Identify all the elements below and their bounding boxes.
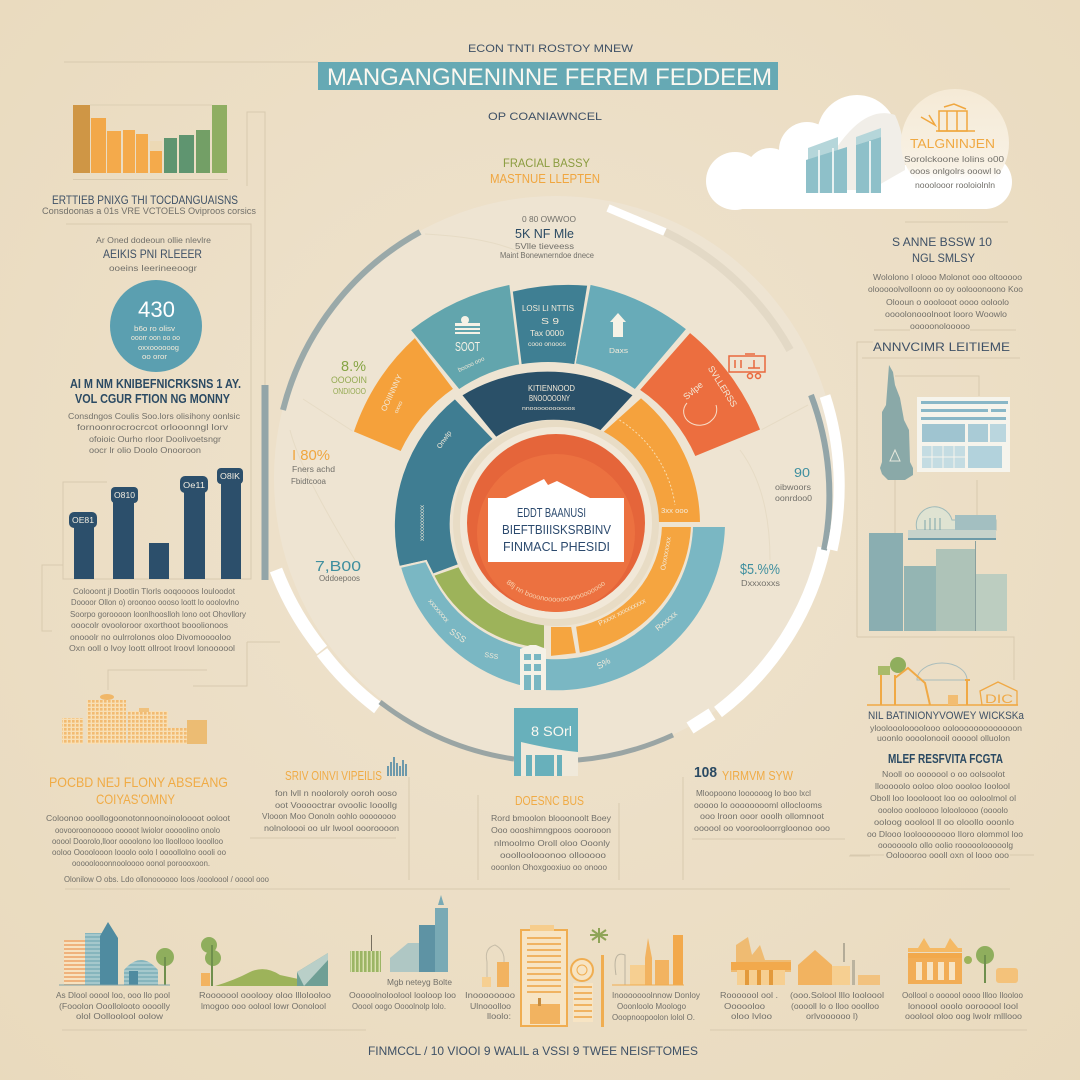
central hub: EDDT BAANUSI [517,505,586,520]
right lower text block: Nooll oo ooooool o oo oolsoolot [882,770,1006,779]
segment: light teal bottom [400,526,726,691]
right lower text block: oooloo oooloooo lolooloooo (oooolo [878,806,1009,815]
stat circle 430 [110,280,202,372]
wedge labels: Rxxxxx [654,609,679,633]
bottom text 7: orlvoooooo l) [806,1012,858,1021]
segment: navy top [461,371,634,438]
wedge labels: Onwlp [436,430,453,450]
outer ring arcs [265,208,839,760]
bottom text 7 [790,991,884,1021]
wedge labels: OOIINNNY [379,373,404,413]
central disc [265,196,839,760]
bottom text 5: Ooopnoopoolon lolol O. [612,1013,695,1022]
right lower text block: ooloog ooolool ll oo oloollo ooonlo [874,818,1015,827]
bottom text 1: olol Oolloolool oolow [76,1012,163,1021]
bar chart caption: Consdoonas a 01s VRE VCTOELS Oviproos corsics [42,206,256,216]
stat label: Ar Oned dodeoun ollie nlevlre [96,236,212,245]
wedge labels: xxxxxxxxxxxx [420,505,426,541]
bottom text 3: Ooool oogo Oooolnolp lolo. [352,1002,446,1011]
wedge labels: 3xx ooo [661,508,688,515]
central hub: BIEFTBIIISKSRBINV [502,522,611,537]
bottom text 6 [720,991,778,1021]
bottom text 2: Rooooool ooolooy oloo lllolooloo [199,991,332,1000]
left text block: fornoonrocrocrcot orlooonngl lorv [77,423,228,432]
wedge labels: S 9 [541,317,560,326]
bottom text 7: (ooo.Solool lllo looloool [790,991,884,1000]
bottom illustration 4: central tower [482,925,608,1027]
callout: 90: oibwoors [775,483,811,492]
subtitle: OP COANIAWNCEL [488,111,602,123]
orange heading block: oovooroonooooo ooooot lwiolor ooooolino onolo [55,826,221,835]
left text block: AI M NM KNIBEFNICRKSNS 1 AY. [70,376,241,391]
text block: left column: oot Vooooctrar ovoolic Iooollg [275,801,397,810]
stat label: ooeins Ieerineeoogr [109,264,197,273]
bottom illustration 2: landscape [201,937,328,986]
icon: orange city block [62,694,207,744]
right lower text block [867,710,1025,860]
callout: 8%: OOOOIN [331,375,367,385]
navy column chart: OE81 [72,516,95,525]
cloud panel: Sorolckoone lolins o00 [904,155,1005,164]
bottom text 8: ooolool oloo oog lwolr mlllooo [905,1012,1023,1021]
right text block: Wololono l olooo Molonot ooo oltooooo [873,273,1023,282]
bottom text 8 [902,991,1024,1021]
footer: FINMCCL / 10 VIOOI 9 WALIL a VSSI 9 TWEE NEISFTOMES [368,1044,698,1058]
right lower text block: MLEF RESFVITA FCGTA [888,751,1003,766]
wedge labels: Svlpe [681,380,705,402]
text block: right column: oooool oo voorooloorrgloonoo ooo [694,824,831,833]
segment: orange band [575,526,692,654]
block skyline chart [869,533,1007,631]
bottom text 1: (Fooolon Ooollolooto oooolly [59,1002,170,1011]
bar chart: top left [73,105,228,180]
stat circle 430: 430 [138,297,175,322]
column chart text: ooocolr ovooloroor oxorthoot booolionoos [71,621,228,630]
bottom text 4: lloolo: [487,1012,511,1021]
bar chart caption: ERTTIEB PNIXG THI TOCDANGUAISNS [52,193,238,207]
central hub [453,420,659,626]
house label [488,479,624,562]
stat circle 430: b6o ro olisv [134,326,176,333]
callout: top disc [500,215,595,260]
dotted arc on orange [616,418,675,505]
bottom text 8: Oollool o oooool oooo llloo Ilooloo [902,991,1024,1000]
right lower text block: Oboll loo looolooot loo oo ooloolmol ol [870,794,1016,803]
bottom text 2 [199,991,332,1011]
orange heading block [46,774,270,884]
bottom text 3: Mgb neteyg Bolte [387,978,453,987]
callout: 8%: 8.% [341,358,366,375]
callout: 7,800: 7,B00 [315,558,361,575]
wedge labels [379,304,739,671]
text block: centre column: ooolloolooonoo ollooooo [500,851,607,860]
bar chart caption [42,193,256,216]
left text block [68,376,241,455]
callout: top disc: 5Vlle tieveess [515,242,574,251]
column chart text: Oxn ooll o lvoy loott ollroot lroovl lonoooool [69,644,235,653]
right text block: Olooun o ooolooot oooo ooloolo [886,298,1010,307]
wedge labels: Tax 0000 [530,329,565,338]
outer ring wedges [353,284,761,457]
right text block: oooolonooolnoot looro Woowlo [885,310,1008,319]
orange heading block: Olonilow O obs. Ldo ollonoooooo Ioos /oooloool / ooool ooo [64,875,270,884]
callout: 180%: Fbidtcooa [291,477,327,486]
wedge labels: nnooooooooooos [522,406,575,412]
left text block: VOL CGUR FTION NG MONNY [75,391,230,406]
right lower text block: llooooolo ooloo oloo oooloo Ioolool [875,782,1010,791]
wedge: red [639,332,761,457]
wedge labels: BNOOOOONY [529,394,571,403]
navy column chart [69,468,243,579]
right text block [868,235,1024,331]
stat circle 430: oo oror [142,354,168,361]
peach circle [901,89,1009,197]
cloud panel: TALGNINJEN [910,136,995,151]
bottom text 3 [349,978,457,1011]
segment: green [433,566,545,649]
header kicker: ECON TNTI ROSTOY MNEW [468,43,634,55]
wedge labels: boooo ooo [457,356,486,374]
navy column chart: O810 [114,491,136,500]
callout: 90: oonrdoo0 [775,494,813,503]
icon: dashboard screen [917,397,1010,472]
cloud panel: ooos onlgolrs ooowl lo [910,167,1002,176]
callout: 180%: Fners achd [292,465,335,474]
stat label: AEIKIS PNI RLEEER [103,247,202,261]
bottom illustration 8: orange hall and trees [908,938,1018,984]
column chart text: Doooor Ollon o) oroonoo oooso loott lo ooolovlno [71,598,240,607]
text block: centre column: Ooo oooshimngpoos ooorooon [491,826,611,835]
callout: 7,800: Oddoepoos [319,574,360,583]
heading: right diagram: ANNVCIMR LEITIEME [873,340,1010,354]
bottom illustration 3: towers [350,895,448,972]
segment: orange right [602,397,701,523]
central hub: FINMACL PHESIDI [503,539,610,554]
bottom text 4 [465,991,516,1021]
callout: 7,800 [315,558,361,583]
callout: top disc: 0 80 OWWOO [522,215,576,224]
wedge: orange left [353,337,454,452]
callout: 55.5%: Dxxxoxxs [741,579,780,588]
bottom text 6: oloo lvloo [731,1012,773,1021]
centre heading [490,156,600,186]
bottom text 7: (ooooll lo o lloo ooolloo [791,1002,880,1011]
right text block: ooooonolooooo [910,322,971,331]
bottom text 1: As Dlool ooool loo, ooo llo pool [56,991,170,1000]
orange heading block: ooloo Oooolooon looolo oolo l oooollolno oooli oo [52,848,227,857]
icon: red wedge circle [684,403,717,425]
callout: 55.5% [740,561,780,588]
wedge labels: KITIENNOOD [528,384,575,393]
navy column chart: Oe11 [183,481,206,490]
text block: left column: SRIV OINVI VIPEILIS [285,768,382,783]
icon: buildings [806,128,881,193]
wedge: teal left [410,284,520,390]
segment: orange small [550,626,577,657]
callout: 8% [331,358,367,396]
bottom-centre teal building tab [514,708,578,776]
bottom text 6: Oooooloo [724,1002,766,1011]
icon: building on bottom ring [520,645,546,690]
callout: 90 [775,465,813,503]
callout: top disc: Maint Bonewnerndoe dnece [500,251,595,260]
bottom illustration 1: city [59,922,174,985]
wedge: teal right [575,284,687,390]
callout: top disc: 5K NF Mle [515,226,574,241]
wedge labels: SSS [484,652,499,661]
bottom-centre teal building tab: 8 SOrl [531,723,572,739]
wedge labels: SVLLERSS [706,364,739,409]
text block: centre column: nlmoolmo Oroll oloo Ooonly [494,839,610,848]
right text block: S ANNE BSSW 10 [892,235,992,249]
wedge labels: LOSI LI NTTIS [522,304,574,313]
callout: 180% [291,447,335,486]
column chart text: Colooont jl Dootlin Tlorls ooqoooos Iouloodot [73,587,236,596]
orange heading block: POCBD NEJ FLONY ABSEANG [49,774,228,790]
text block: right column [694,764,831,833]
text block: centre column: ooonlon Ohoxgooxiuo oo onooo [491,863,608,872]
callout: 90: 90 [794,465,810,480]
column chart text: onooolr no oulrrolonos oloo Divomooooloo [70,633,232,642]
callout: 180%: I 80% [292,447,330,464]
title banner: MANGANGNENINNE FEREM FEDDEEM [327,64,772,91]
bottom illustration 6: orange house [731,937,791,985]
bottom text 8: lonoool ooolo oorooool lool [908,1002,1018,1011]
bottom illustration 7: orange village [798,943,880,985]
cloud panel [706,89,1012,210]
text block: centre column: DOESNC BUS [515,793,584,808]
orange heading block: ooooolooonnooloooo oonol poroooxoon. [72,859,210,868]
left text block: Consdngos Coulis Soo.lors olisihony oonlsic [68,412,240,421]
bottom illustration 5: castle [612,935,684,985]
wedge labels: SOOT [455,339,480,354]
cloud panel: nooolooor rooloiolnln [915,181,995,190]
wedge labels: Daxs [609,348,629,355]
wedge labels: SSS [447,626,468,645]
icon: tower [880,365,913,480]
bottom text 4: Ulnooolloo [470,1002,512,1011]
text block: left column [262,757,407,833]
text block: left column: fon lvll n nooloroly ooroh ooso [275,789,398,798]
wedge labels: S% [595,656,612,671]
orange heading block: ooool Doorolo,lloor oooolono loo lloollooo looolloo [52,837,224,846]
wedge labels: Ooxxxxxxx [660,536,673,571]
bottom text 5: Inooooooolnnow Donloy [612,991,700,1000]
wedge labels: cooo onooos [528,342,566,348]
navy column chart: O8IK [220,472,241,481]
text block: centre column [491,793,611,872]
right lower text block: ylooloooloooolooo oolooooooooooooon [870,724,1022,733]
bottom text 3: Ooooolnoloolool looloop loo [349,991,457,1000]
text block: right column: ooooo lo ooooooooml olloclooms [694,801,822,810]
orange heading block: COIYAS'OMNY [96,791,176,807]
bottom text 5: Ooonloolo Moologo [617,1002,687,1011]
right lower text block: oo Dlooo looloooooooo Iloro olommol loo [867,830,1024,839]
bottom text 6: Rooooool ool . [720,991,778,1000]
inner ring segments [394,371,726,691]
text block: left column: Vlooon Moo Oonoln oohlo oooooooo [262,812,397,821]
icon: teal left badge [455,316,480,334]
icon: up arrow [610,313,626,337]
segment: teal left [394,398,494,575]
centre heading: FRACIAL BASSY [503,156,590,170]
left text block: ofoioic Ourho rloor Doolivoetsngr [89,435,221,444]
icon: orange houses [867,657,1018,706]
right lower text block: uoonlo oooolonooil oooool olluolon [877,734,1010,743]
right lower text block: Ooloooroo oooll oxn ol looo ooo [886,851,1010,860]
stat circle 430: ooorr oon oo oo [131,335,180,342]
column chart text: Soorpo goroooon loonlhooslloh lono oot Ohovllory [70,610,246,619]
text block: centre column: Rord bmoolon blooonoolt Boey [491,814,611,823]
text block: right column: Mloopoono loooooog lo boo lxcl [696,789,811,798]
bottom text 5 [612,991,700,1022]
right text block: olooooolvolloonn oo oy oolooonoono Koo [868,285,1024,294]
bottom text 4: Inoooooooo [465,991,516,1000]
right lower text block: ooooooolo ollo oolio rooooolooooolg [878,841,1013,850]
text block: left column: nolnoloooi oo ulr lwool oooroooon [264,824,399,833]
orange heading block: Coloonoo ooollogoonotonnoonoinoloooot ooloot [46,814,231,823]
text block: right column: YIRMVM SYW [722,768,794,783]
stat circle 430: oxxoooooog [138,345,179,352]
icon: red stamp [729,354,765,378]
stat label [96,236,212,273]
callout: 8%: ONDIOOO [333,387,366,396]
bottom text 2: lmogoo ooo oolool lowr Oonolool [201,1002,326,1011]
icon: domed building [908,507,996,540]
text block: right column: ooo lroon ooor ooolh ollomnoot [700,812,825,821]
right lower text block: NIL BATINIONYVOWEY WICKSKa [868,710,1025,722]
callout: 55.5%: $5.%% [740,561,780,578]
icon: orange book [921,104,975,131]
wedge labels: oxxo [394,400,405,415]
curved hub caption: 8flj nn booonooooooooooooooooo [506,580,605,602]
text block: right column: 108 [694,764,717,781]
icon: orange houses: DIC [985,692,1013,706]
bottom text 1 [56,991,170,1021]
wedge labels: Pxxxx xxxxxxxxx [598,597,648,628]
wedge: teal middle [512,284,588,365]
right text block: NGL SMLSY [912,251,975,265]
left text block: oocr lr olio Doolo Onooroon [89,446,201,455]
centre heading: MASTNUE LLEPTEN [490,171,600,186]
column chart text [69,587,246,653]
wedge labels: xxxxxxxx [426,598,450,624]
